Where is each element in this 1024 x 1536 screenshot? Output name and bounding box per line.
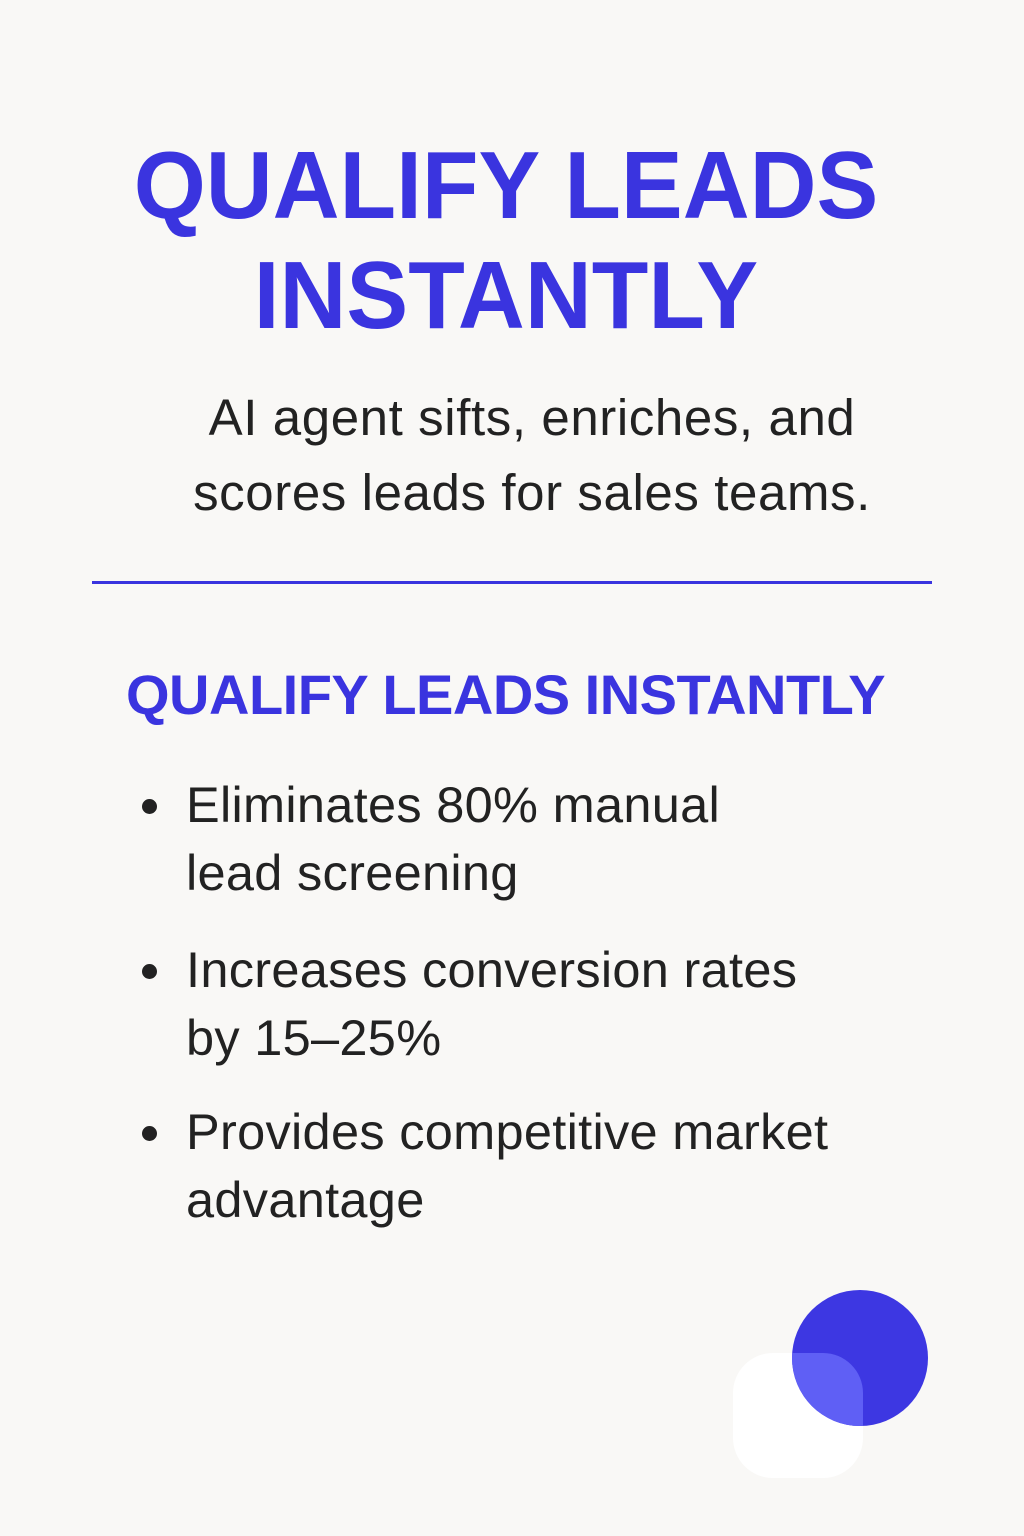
bullet 1: Eliminates 80% manual: [186, 776, 720, 833]
subtitle: [193, 389, 871, 521]
subtitle: AI agent sifts, enriches, and: [209, 389, 855, 446]
bullet 1: [186, 771, 720, 907]
section heading: QUALIFY LEADS INSTANTLY: [126, 663, 885, 726]
bullet 1: lead screening: [186, 844, 519, 901]
title: INSTANTLY: [254, 242, 758, 349]
bullet 2: Increases conversion rates: [186, 941, 797, 998]
bullet 3: [186, 1098, 828, 1234]
title: QUALIFY LEADS: [134, 132, 878, 239]
bullet 3: Provides competitive market: [186, 1103, 828, 1160]
title: [134, 132, 878, 349]
bullet 3: advantage: [186, 1171, 425, 1228]
bullet 2: by 15–25%: [186, 1009, 441, 1066]
bullet 2: [186, 936, 797, 1072]
subtitle: scores leads for sales teams.: [193, 464, 871, 521]
decorative shapes: [733, 1290, 928, 1478]
